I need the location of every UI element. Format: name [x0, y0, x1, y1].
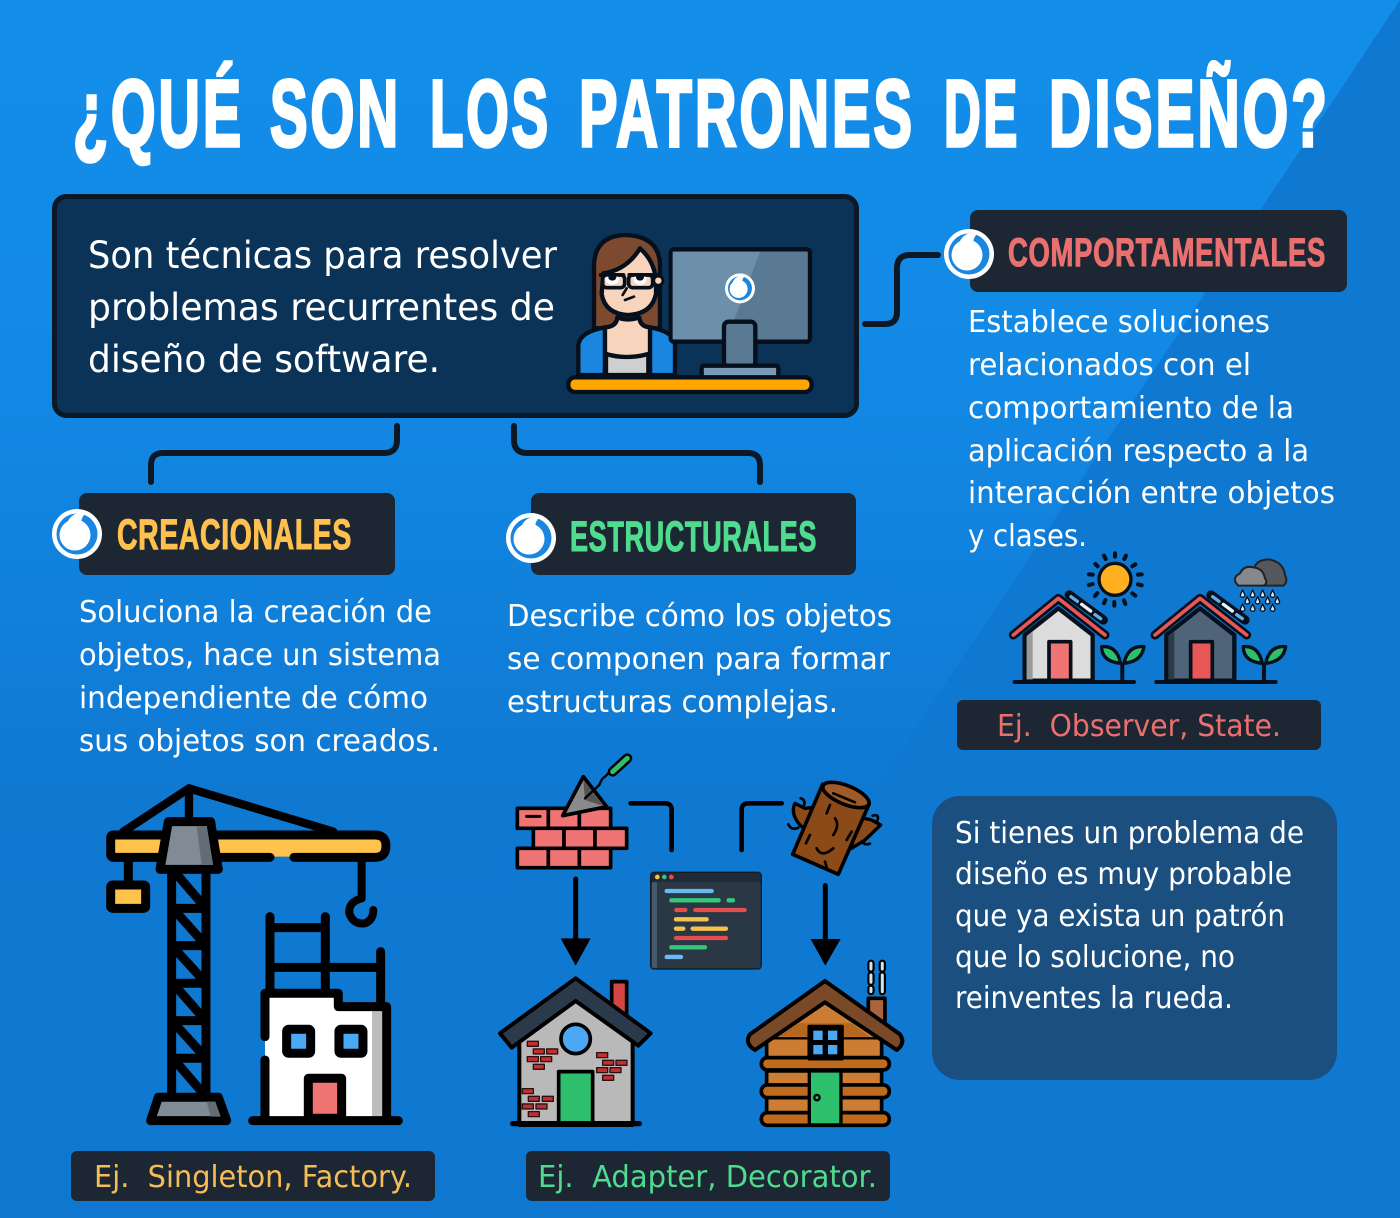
text: comportamentales description: comportamiento de la — [968, 391, 1294, 426]
building — [253, 993, 398, 1121]
panel background — [54, 196, 856, 416]
text: creacionales description: objetos, hace un sistema — [79, 638, 441, 673]
tag text: Ej. Adapter, Decorator. — [538, 1160, 877, 1195]
icon: crane and building — [111, 788, 398, 1121]
text: estructurales description: se componen para formar — [507, 642, 891, 677]
icon: adapter diagram — [500, 758, 902, 1125]
definition text: Son técnicas para resolver — [88, 234, 558, 277]
crane tower — [172, 870, 206, 1093]
connector: bricks to code — [631, 803, 672, 850]
heading text: ESTRUCTURALES — [570, 513, 817, 561]
definition text: problemas recurrentes de — [88, 286, 555, 329]
callout text: diseño es muy probable — [955, 857, 1292, 892]
icon: rainy house — [1155, 595, 1286, 682]
connector: definition to comportamentales — [865, 255, 938, 324]
text: comportamentales description: Establece soluciones — [968, 305, 1270, 340]
heading bar — [79, 493, 395, 575]
tag text: Ej. Singleton, Factory. — [94, 1160, 412, 1195]
heading: comportamentales — [944, 210, 1347, 292]
connector: definition to creacionales — [151, 426, 397, 482]
title: ¿QUÉ — [73, 61, 244, 167]
counterweight — [111, 860, 146, 908]
text: comportamentales description: y clases. — [968, 519, 1087, 554]
crane cab — [160, 822, 218, 869]
callout text — [955, 816, 1304, 1016]
arrow: log to cabin — [811, 886, 841, 966]
title: DE — [944, 61, 1020, 167]
icon: bricks — [517, 808, 627, 868]
callout text: Si tienes un problema de — [955, 816, 1304, 851]
icon: logo — [506, 513, 556, 563]
icon: logo — [52, 509, 102, 559]
text: estructurales description — [507, 599, 892, 720]
title: SON — [270, 61, 401, 167]
text: creacionales description — [79, 595, 441, 759]
icon: houses in sun and rain — [1013, 553, 1286, 682]
heading text: CREACIONALES — [117, 511, 352, 559]
text: creacionales description: Soluciona la creación de — [79, 595, 432, 630]
text: creacionales description: independiente de cómo — [79, 681, 428, 716]
definition text: diseño de software. — [88, 338, 440, 381]
heading: estructurales — [506, 493, 856, 575]
tag background — [71, 1151, 435, 1201]
title: PATRONES — [579, 61, 915, 167]
callout text: reinventes la rueda. — [955, 981, 1233, 1016]
icon: sunny house — [1013, 595, 1144, 682]
tag text: Ej. Observer, State. — [997, 709, 1281, 744]
callout text: que lo solucione, no — [955, 940, 1235, 975]
hook — [349, 860, 373, 924]
text: estructurales description: estructuras complejas. — [507, 685, 838, 720]
callout text: que ya exista un patrón — [955, 899, 1285, 934]
tag background — [526, 1151, 890, 1201]
panel: definition — [54, 196, 856, 416]
text: creacionales description: sus objetos son creados. — [79, 724, 440, 759]
example tag: singleton — [71, 1151, 435, 1201]
connector: log to code — [742, 803, 782, 850]
title: LOS — [430, 61, 551, 167]
icon: code window — [650, 872, 762, 970]
icon: logo — [944, 229, 994, 279]
icon: log cabin — [748, 963, 902, 1125]
text: comportamentales description: interacción entre objetos — [968, 476, 1335, 511]
text: comportamentales description: aplicación respecto a la — [968, 434, 1309, 469]
heading: creacionales — [52, 493, 395, 575]
scaffold — [270, 917, 381, 1003]
text: comportamentales description — [968, 305, 1335, 554]
icon: rain cloud — [1235, 559, 1286, 611]
icon: log — [788, 777, 881, 874]
text: comportamentales description: relacionados con el — [968, 348, 1251, 383]
tag background — [957, 700, 1321, 750]
definition text — [88, 234, 558, 381]
crane jib — [111, 788, 386, 857]
heading bar — [970, 210, 1347, 292]
heading bar — [531, 493, 856, 575]
icon: developer at computer — [568, 235, 812, 392]
arrow: bricks to house — [561, 879, 591, 966]
icon: sun — [1089, 553, 1142, 606]
connector: definition to estructurales — [514, 426, 760, 482]
example tag: adapter — [526, 1151, 890, 1201]
title — [73, 61, 1330, 167]
icon: trowel — [563, 758, 627, 816]
callout background — [932, 796, 1337, 1080]
text: estructurales description: Describe cómo los objetos — [507, 599, 892, 634]
crane base — [151, 1097, 227, 1121]
callout: do not reinvent the wheel — [932, 796, 1337, 1080]
icon: brick house — [500, 978, 651, 1125]
example tag: observer — [957, 700, 1321, 750]
